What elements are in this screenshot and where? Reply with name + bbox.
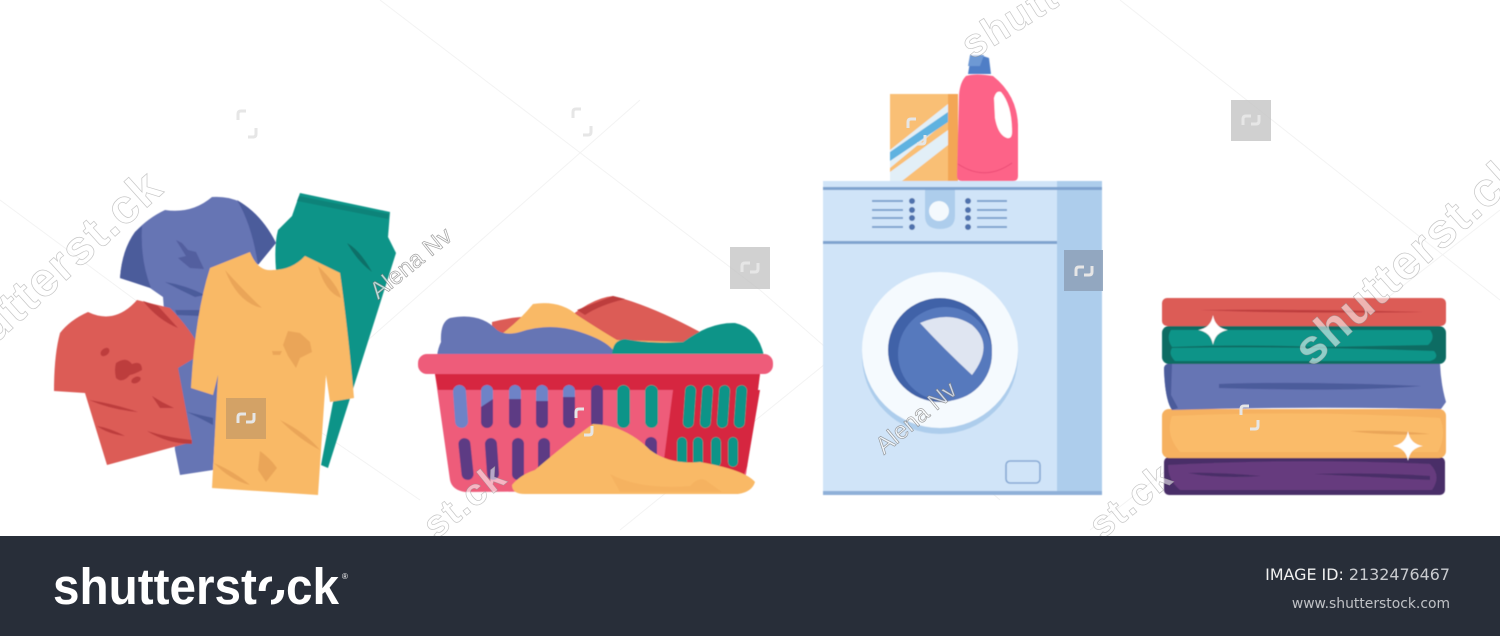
stock watermarks: Alena Nv <box>365 222 457 305</box>
green trousers <box>275 193 396 468</box>
door <box>862 272 1018 434</box>
green towel <box>1162 326 1446 364</box>
sparkle lower <box>1393 431 1423 461</box>
softener bottle <box>957 55 1018 181</box>
sparkle upper <box>1198 315 1228 345</box>
basket body <box>418 354 773 492</box>
machine body <box>823 181 1102 495</box>
purple towel <box>1164 457 1445 495</box>
stock watermarks: Alena Nv <box>871 376 962 460</box>
blue towel <box>1164 363 1446 410</box>
laundry basket <box>418 296 773 494</box>
blue shirt <box>120 197 276 475</box>
red shirt <box>54 300 203 465</box>
small hatch <box>1006 461 1040 483</box>
image id: IMAGE ID: 2132476467 <box>1265 565 1450 584</box>
footer bar <box>0 536 1500 636</box>
shutterstock logo: ® <box>342 572 348 581</box>
clothes in basket <box>437 296 764 356</box>
yellow towel <box>1162 409 1446 458</box>
stock watermarks: st.ck <box>415 455 515 547</box>
stack of clean folded clothes <box>1162 298 1446 495</box>
website: www.shutterstock.com <box>1292 596 1450 612</box>
yellow shirt <box>191 252 354 495</box>
shutterstock logo: shutterstock <box>53 558 340 615</box>
yellow garment spilling over <box>512 424 755 494</box>
watermark tiles <box>226 100 1271 439</box>
washing machine <box>823 55 1102 495</box>
control panel <box>872 190 1007 230</box>
red towel <box>1162 298 1446 326</box>
pile of dirty clothes <box>54 193 396 495</box>
detergent box <box>890 94 958 181</box>
stock watermarks: st.ck <box>1081 455 1181 547</box>
